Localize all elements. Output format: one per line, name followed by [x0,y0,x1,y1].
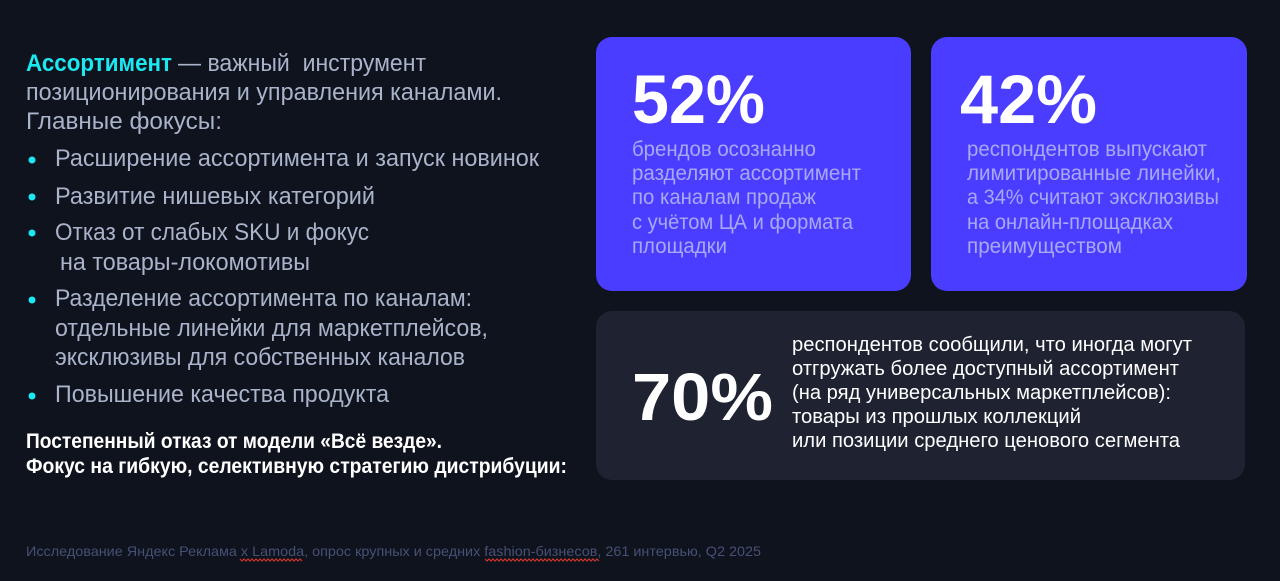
bullet: splitting range by channel: Разделение ассортимента по каналам: [55,285,472,312]
conclusion text [26,430,567,478]
number: 42%: 42% [960,61,1097,138]
text: 42% description [967,138,1221,258]
bullet: dropping weak SKU: на товары-локомотивы [60,249,310,276]
text: 70% description: или позиции среднего ценового сегмента [792,430,1181,452]
bullet list: main focuses [28,145,539,408]
bullet: dropping weak SKU [28,219,369,276]
left column: text [26,50,567,478]
conclusion text: Фокус на гибкую, селективную стратегию дистрибуции: [26,455,567,478]
heading: assortment intro: Ассортимент [26,50,172,77]
text: 42% description: преимуществом [967,235,1122,258]
bullet: dropping weak SKU: Отказ от слабых SKU и фокус [55,219,369,246]
bullet: splitting range by channel [28,285,488,371]
text: 52% description: площадки [632,235,727,258]
text: 42% description: а 34% считают эксклюзивы [967,186,1219,209]
text: 70% description: (на ряд универсальных маркетплейсов): [792,382,1171,404]
bullet: splitting range by channel: эксклюзивы для собственных каналов [55,344,465,371]
text: 52% description: с учётом ЦА и формата [632,211,853,234]
text: 42% description: лимитированные линейки, [967,162,1221,185]
text: 52% description: по каналам продаж [632,186,816,209]
bullet: niche categories: Развитие нишевых категорий [55,183,375,210]
heading: assortment intro [26,50,502,135]
panel: 52% stat [596,37,911,291]
panel: 70% stat [596,311,1245,480]
conclusion text: Постепенный отказ от модели «Всё везде». [26,430,442,453]
text: 52% description [632,138,861,258]
number: 70%: 70% [632,360,773,435]
bullet: range expansion: Расширение ассортимента и запуск новинок [55,145,539,172]
text: 70% description: товары из прошлых коллекций [792,406,1081,428]
heading: assortment intro: — важный инструмент [178,50,426,77]
text: 70% description: отгружать более доступный ассортимент [792,358,1179,380]
text: 42% description: на онлайн-площадках [967,211,1173,234]
panel: 42% stat [931,37,1247,291]
bullet: product quality: Повышение качества продукта [55,381,390,408]
footnote: source: Исследование Яндекс Реклама x Lamoda, опрос крупных и средних fashion-бизнесов, 261 интервью, Q2 2025 [26,543,761,559]
bullet: splitting range by channel: отдельные линейки для маркетплейсов, [55,315,488,342]
number: 52%: 52% [632,61,765,138]
text: 52% description: разделяют ассортимент [632,162,861,185]
heading: assortment intro: Главные фокусы: [26,108,222,135]
text: 52% description: брендов осознанно [632,138,816,161]
heading: assortment intro: позиционирования и управления каналами. [26,79,502,106]
text: 70% description [792,334,1192,452]
text: 42% description: респондентов выпускают [967,138,1207,161]
text: 70% description: респондентов сообщили, что иногда могут [792,334,1192,356]
